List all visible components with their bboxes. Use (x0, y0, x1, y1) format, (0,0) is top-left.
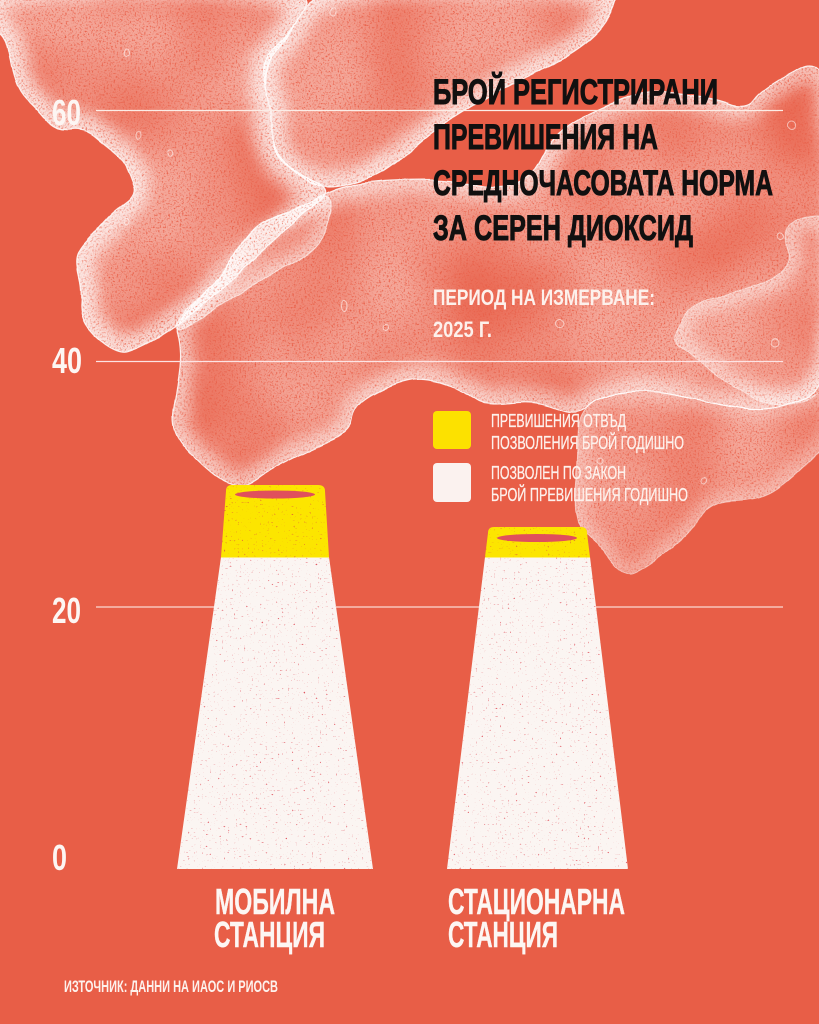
white allowed segment (440, 558, 635, 872)
measurement period: 2025 Г. (433, 317, 492, 342)
legend text: ПОЗВОЛЕН ПО ЗАКОН (491, 463, 626, 483)
white allowed segment (170, 558, 380, 872)
title (433, 72, 773, 248)
small bubbles in the smoke (124, 8, 796, 484)
source note: ИЗТОЧНИК: ДАННИ НА ИАОС И РИОСВ (64, 978, 278, 996)
category labels: СТАНЦИЯ (214, 914, 325, 955)
title: ЗА СЕРЕН ДИОКСИД (433, 209, 693, 248)
speckle texture (170, 480, 380, 872)
category labels: МОБИЛНА (215, 881, 335, 922)
legend swatch: white (433, 463, 471, 502)
chimney: stationary station (440, 520, 635, 872)
legend text: ПРЕВИШЕНИЯ ОТВЪД (491, 411, 626, 431)
y axis labels (52, 92, 82, 878)
title: ПРЕВИШЕНИЯ НА (433, 118, 658, 157)
y axis labels: 60 (52, 92, 81, 133)
yellow exceedance segment (485, 527, 590, 558)
chimney opening (235, 490, 315, 498)
yellow exceedance segment (220, 485, 330, 558)
category labels: СТАНЦИЯ (448, 914, 558, 955)
smoke cloud illustration (0, 0, 819, 575)
chimney: mobile station (170, 480, 380, 872)
title: БРОЙ РЕГИСТРИРАНИ (433, 72, 718, 112)
grid lines (96, 110, 783, 607)
y axis labels: 40 (52, 340, 82, 381)
category labels: СТАЦИОНАРНА (448, 881, 625, 922)
legend text: БРОЙ ПРЕВИШЕНИЯ ГОДИШНО (491, 484, 688, 505)
legend swatch: yellow (433, 411, 471, 449)
measurement period (433, 285, 655, 342)
legend text: ПОЗВОЛЕНИЯ БРОЙ ГОДИШНО (491, 432, 684, 453)
y axis labels: 20 (52, 590, 81, 631)
category labels (214, 881, 625, 955)
speckle texture (448, 527, 628, 869)
chimney opening (497, 534, 577, 542)
y axis labels: 0 (52, 837, 67, 878)
measurement period: ПЕРИОД НА ИЗМЕРВАНЕ: (433, 285, 655, 310)
legend text (491, 411, 688, 505)
legend (433, 411, 688, 505)
